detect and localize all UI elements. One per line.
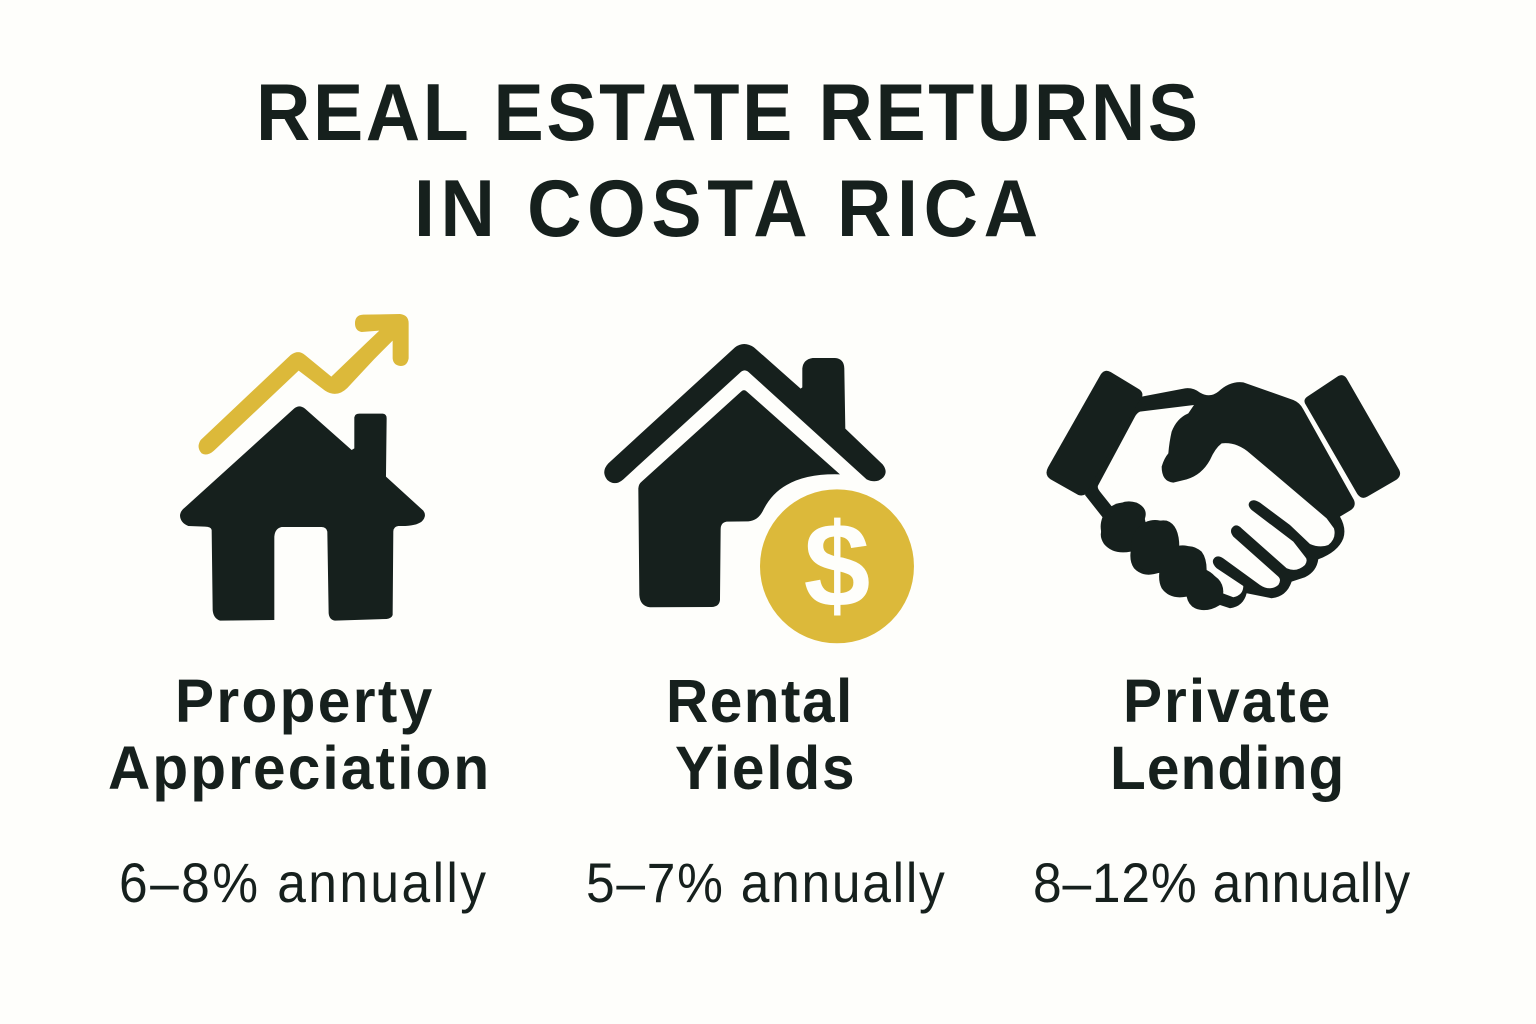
- heading: private lending: Lending: [1110, 734, 1344, 802]
- value: 5–7% annually: 5–7% annually: [586, 852, 945, 914]
- heading: rental yields: [666, 667, 855, 802]
- panel: property appreciation: [108, 314, 489, 914]
- panel: rental yields: [586, 344, 945, 914]
- title: [256, 66, 1198, 254]
- heading: private lending: [1110, 667, 1344, 802]
- icon: dollar coin: [760, 489, 914, 643]
- icon: house with rising arrow: [180, 314, 425, 621]
- heading: property appreciation: Appreciation: [108, 734, 489, 802]
- title: IN COSTA RICA: [414, 162, 1038, 254]
- heading: property appreciation: [108, 667, 489, 802]
- title: REAL ESTATE RETURNS: [256, 66, 1198, 158]
- value: 6–8% annually: 6–8% annually: [119, 852, 486, 914]
- heading: property appreciation: Property: [175, 667, 432, 735]
- heading: rental yields: Rental: [666, 667, 852, 735]
- panel: private lending: [1033, 371, 1410, 914]
- icon: handshake: [1046, 371, 1400, 610]
- value: 8–12% annually: 8–12% annually: [1033, 852, 1410, 914]
- icon: house with dollar coin: [604, 344, 914, 643]
- heading: rental yields: Yields: [675, 734, 855, 802]
- heading: private lending: Private: [1123, 667, 1330, 735]
- icon: dollar coin: $: [804, 499, 870, 633]
